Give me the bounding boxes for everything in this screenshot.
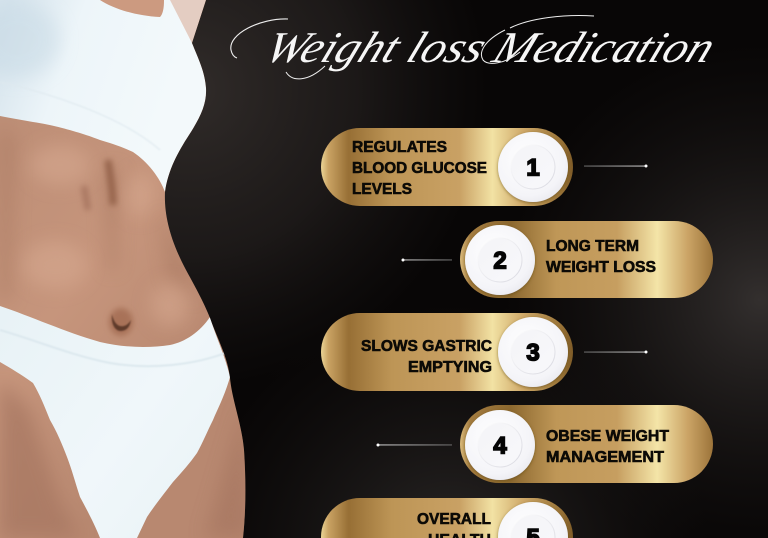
item 4: obese weight management: OBESE WEIGHT	[546, 428, 670, 445]
item 3: slows gastric emptying	[321, 313, 648, 391]
skin	[0, 0, 260, 538]
abdominal shading	[106, 206, 185, 280]
item 2: long term weight loss: LONG TERM	[546, 238, 639, 255]
title	[231, 16, 723, 79]
abdominal highlights	[23, 145, 190, 327]
item 3: slows gastric emptying: SLOWS GASTRIC	[361, 338, 492, 355]
item 5: overall health (cropped by the frame): OVERALL	[417, 511, 491, 528]
item 1: regulates blood glucose levels: REGULATES	[352, 139, 447, 156]
raised arm	[168, 0, 206, 43]
underwear	[0, 306, 230, 538]
title swash: M	[481, 16, 594, 63]
item 1: regulates blood glucose levels: BLOOD GLUCOSE	[352, 160, 487, 177]
item 4: obese weight management: MANAGEMENT	[546, 449, 665, 466]
item 1: regulates blood glucose levels	[321, 128, 648, 206]
title swash: g descender	[286, 66, 325, 79]
item 2: long term weight loss: WEIGHT LOSS	[546, 259, 656, 276]
item 1: regulates blood glucose levels: 1	[526, 154, 540, 182]
item 2: long term weight loss	[402, 221, 713, 298]
item 3: slows gastric emptying: EMPTYING	[408, 359, 492, 376]
item 1: regulates blood glucose levels: LEVELS	[352, 181, 412, 198]
leg shading	[0, 380, 250, 538]
neckline skin	[100, 0, 164, 17]
item 5: overall health (cropped by the frame)	[321, 498, 573, 538]
photo: woman's torso in white underwear	[0, 0, 260, 538]
item 4: obese weight management: 4	[493, 432, 507, 460]
navel	[109, 308, 133, 336]
title: Weight loss Medication	[258, 23, 723, 72]
sports bra	[0, 0, 206, 192]
title swash: W	[231, 19, 288, 58]
item 3: slows gastric emptying: 3	[526, 340, 540, 366]
item 2: long term weight loss: 2	[493, 248, 507, 274]
central abdominal crease	[84, 160, 113, 210]
item 4: obese weight management	[376, 405, 713, 483]
